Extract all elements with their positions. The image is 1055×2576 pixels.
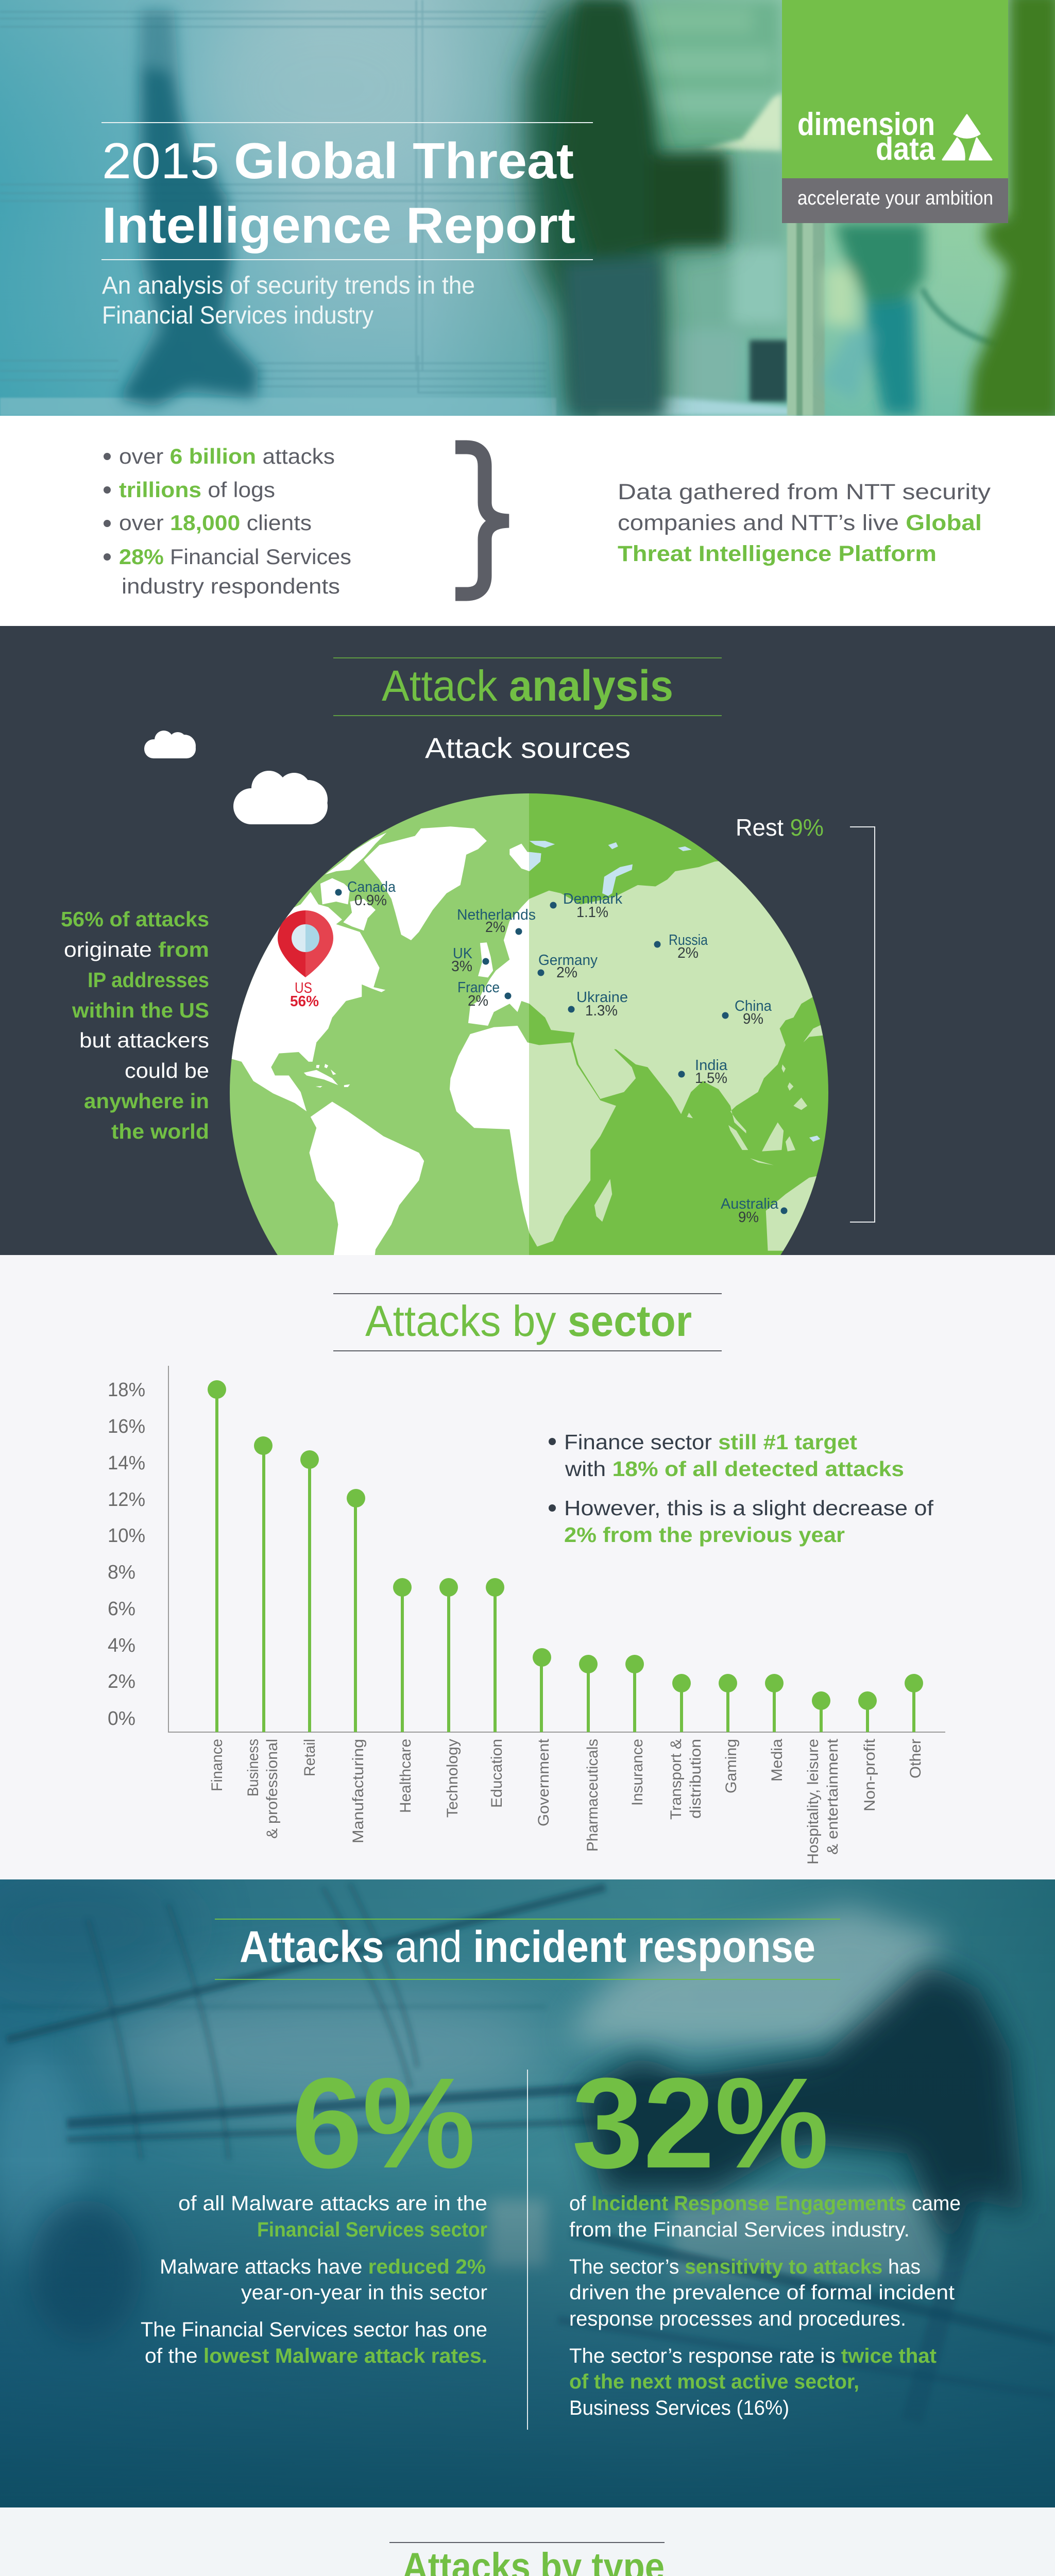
- map country labels: Russia: [669, 932, 708, 948]
- central dark walking figure: [525, 0, 726, 415]
- map country labels: Denmark: [563, 891, 622, 907]
- y axis labels: [108, 1379, 145, 1730]
- icon: red map pin on the US: [278, 910, 333, 977]
- sector category labels: Insurance: [629, 1739, 646, 1806]
- stat: 6 percent malware: [141, 2051, 487, 2367]
- data source statement: [618, 480, 991, 566]
- sector category labels: Other: [907, 1739, 924, 1778]
- map country labels: Canada: [347, 879, 396, 895]
- lollipop chart: [108, 1366, 945, 1865]
- y axis labels: 14%: [108, 1452, 145, 1474]
- stat: 32 percent incident response: [569, 2051, 961, 2419]
- map country labels: Ukraine: [576, 989, 628, 1006]
- report title: 2015 Global Threat: [102, 132, 574, 189]
- stat: 32 percent incident response: 32%: [572, 2051, 829, 2195]
- text block: finance sector findings: with 18% of all detected attacks: [565, 1457, 904, 1481]
- pole: [787, 222, 825, 416]
- data source statement: companies and NTT’s live Global: [618, 511, 982, 535]
- map percentage labels: 9%: [743, 1011, 763, 1027]
- y axis labels: 0%: [108, 1708, 135, 1730]
- y axis labels: 18%: [108, 1379, 145, 1401]
- US label: US: [295, 980, 312, 996]
- icon: large cloud: [233, 771, 328, 824]
- report title: Intelligence Report: [102, 197, 575, 253]
- text block: finance sector findings: 2% from the previous year: [564, 1523, 845, 1547]
- sector category labels: Hospitality, leisure: [805, 1739, 822, 1865]
- text block: US share of attacks: the world: [111, 1120, 209, 1143]
- map percentage labels: 2%: [468, 993, 488, 1009]
- malware findings text: Financial Services sector: [257, 2218, 487, 2241]
- tagline: accelerate your ambition: [797, 188, 993, 209]
- map country labels: [347, 879, 779, 1212]
- bullet list of data volumes: over 6 billion attacks: [119, 444, 335, 468]
- map percentage labels: 2%: [485, 919, 505, 936]
- second walking figure: [822, 223, 925, 415]
- map percentage labels: 1.3%: [585, 1003, 618, 1019]
- stat: 6 percent malware: 6%: [292, 2051, 475, 2195]
- map percentage labels: [354, 892, 763, 1226]
- panel: attacks and incident response: [0, 1870, 1055, 2507]
- sector lollipops: [208, 1380, 923, 1732]
- malware findings text: of all Malware attacks are in the: [178, 2192, 487, 2215]
- y axis labels: 12%: [108, 1489, 145, 1511]
- subheading: attack sources: Attack sources: [425, 732, 631, 764]
- globe map: [206, 788, 853, 1266]
- y axis labels: 4%: [108, 1635, 135, 1656]
- dark blurred figure: [577, 1963, 1025, 2267]
- text block: US share of attacks: but attackers: [79, 1028, 209, 1052]
- atrium beams: [0, 1884, 1055, 2421]
- map country labels: China: [735, 998, 772, 1014]
- sector category labels: & professional: [264, 1739, 281, 1839]
- text block: US share of attacks: could be: [125, 1059, 209, 1082]
- map percentage labels: 0.9%: [354, 892, 387, 909]
- sector category labels: Education: [488, 1739, 505, 1808]
- map percentage labels: 9%: [738, 1209, 759, 1226]
- incident response findings text: Business Services (16%): [569, 2397, 789, 2419]
- callout: rest of world bracket: [736, 814, 875, 1222]
- bullet list of data volumes: industry respondents: [122, 574, 340, 598]
- sector category labels: distribution: [687, 1739, 704, 1819]
- sector category labels: Finance: [209, 1739, 226, 1791]
- text block: finance sector findings: Finance sector still #1 target: [564, 1430, 857, 1454]
- text block: finance sector findings: However, this is a slight decrease of: [564, 1496, 934, 1520]
- y axis labels: 6%: [108, 1598, 135, 1620]
- data source statement: Data gathered from NTT security: [618, 480, 991, 504]
- y axis labels: 16%: [108, 1416, 145, 1437]
- incident response findings text: of Incident Response Engagements came: [569, 2192, 961, 2215]
- sector category labels: Business: [245, 1739, 262, 1797]
- brace: [455, 447, 509, 594]
- icon: small cloud: [144, 731, 196, 758]
- bullet list of data volumes: 28% Financial Services: [119, 545, 351, 569]
- map country labels: France: [457, 979, 500, 996]
- US label: 56%: [290, 993, 319, 1010]
- sector category labels: Healthcare: [397, 1739, 414, 1813]
- map country labels: UK: [453, 945, 473, 962]
- malware findings text: [141, 2192, 487, 2367]
- map country labels: Australia: [721, 1196, 779, 1212]
- US label: [290, 980, 319, 1010]
- map percentage labels: 2%: [556, 964, 577, 981]
- logo wordmark: [797, 107, 935, 167]
- panel: attacks by sector: [0, 1255, 1055, 1879]
- chart axes: [168, 1366, 945, 1732]
- divider: [527, 2070, 528, 2430]
- subtitle: Financial Services industry: [102, 302, 373, 329]
- map location markers: [335, 889, 787, 1214]
- sector category labels: Government: [535, 1738, 552, 1826]
- company logo block: [782, 0, 1008, 223]
- bullet list of data volumes: over 18,000 clients: [119, 511, 312, 535]
- bullet list of data volumes: [104, 444, 351, 598]
- map country labels: India: [695, 1057, 728, 1074]
- logo wordmark: dimension: [797, 107, 935, 142]
- sector category labels: Non-profit: [861, 1738, 878, 1811]
- sector category labels: & entertainment: [824, 1738, 841, 1855]
- panel: attack analysis: [0, 626, 1055, 1266]
- y axis labels: 10%: [108, 1525, 145, 1547]
- text block: US share of attacks: anywhere in: [84, 1089, 209, 1113]
- heading: attack analysis: Attack analysis: [382, 662, 673, 710]
- logo wordmark: data: [876, 131, 935, 167]
- data source statement: Threat Intelligence Platform: [618, 541, 937, 566]
- incident response findings text: of the next most active sector,: [569, 2370, 859, 2393]
- y axis labels: 2%: [108, 1671, 135, 1692]
- lit scene behind the lower right text: [489, 2192, 942, 2280]
- text block: finance sector findings: [549, 1430, 934, 1547]
- heading: attacks and incident response: Attacks and incident response: [240, 1922, 815, 1972]
- panel: attacks by type: [0, 2507, 1055, 2576]
- sector category labels: Media: [769, 1739, 786, 1782]
- sector category labels: Transport &: [668, 1739, 685, 1820]
- malware findings text: The Financial Services sector has one: [141, 2318, 487, 2341]
- logo triangle mark: [943, 115, 992, 160]
- left blurred walking figure: [118, 10, 260, 407]
- map percentage labels: 2%: [677, 945, 699, 961]
- panel: hero banner photo with title: [0, 0, 1055, 422]
- stairs behind central figure: [641, 0, 780, 152]
- incident response findings text: The sector’s response rate is twice that: [569, 2345, 937, 2367]
- y axis labels: 8%: [108, 1562, 135, 1583]
- subtitle: An analysis of security trends in the: [102, 272, 475, 299]
- map country labels: Netherlands: [457, 907, 536, 923]
- sector category labels: Pharmaceuticals: [584, 1739, 601, 1852]
- sector category labels: [209, 1738, 924, 1865]
- bullet list of data volumes: trillions of logs: [119, 478, 275, 502]
- text block: US share of attacks: [61, 907, 209, 1143]
- malware findings text: of the lowest Malware attack rates.: [145, 2345, 487, 2367]
- text block: US share of attacks: originate from: [64, 938, 209, 961]
- background photo: glass atrium with blurred figure: [0, 1870, 1055, 2507]
- map percentage labels: 1.1%: [576, 904, 608, 921]
- right edge dark green figure: [968, 0, 1055, 422]
- heading: attacks by sector: Attacks by sector: [365, 1297, 692, 1345]
- sector category labels: Retail: [301, 1739, 318, 1776]
- subtitle: [102, 272, 475, 329]
- incident response findings text: The sector’s sensitivity to attacks has: [569, 2256, 921, 2278]
- text block: US share of attacks: within the US: [72, 998, 209, 1022]
- map country labels: Germany: [538, 952, 598, 969]
- incident response findings text: response processes and procedures.: [569, 2308, 906, 2330]
- sector category labels: Manufacturing: [350, 1739, 367, 1843]
- text block: US share of attacks: 56% of attacks: [61, 907, 209, 931]
- malware findings text: Malware attacks have reduced 2%: [160, 2256, 486, 2278]
- panel: data sources summary: [0, 416, 1055, 626]
- callout: rest of world bracket: Rest 9%: [736, 814, 824, 841]
- hero background photo: blurred commuters in a teal corridor: [0, 0, 1055, 422]
- map percentage labels: 3%: [451, 958, 472, 975]
- report title: [101, 122, 593, 260]
- sector category labels: Technology: [444, 1739, 461, 1818]
- sector category labels: Gaming: [723, 1739, 740, 1793]
- incident response findings text: driven the prevalence of formal incident: [569, 2281, 955, 2304]
- map percentage labels: 1.5%: [695, 1070, 727, 1087]
- text block: US share of attacks: IP addresses: [88, 968, 209, 992]
- incident response findings text: from the Financial Services industry.: [569, 2218, 910, 2241]
- malware findings text: year-on-year in this sector: [241, 2281, 487, 2304]
- incident response findings text: [569, 2192, 961, 2419]
